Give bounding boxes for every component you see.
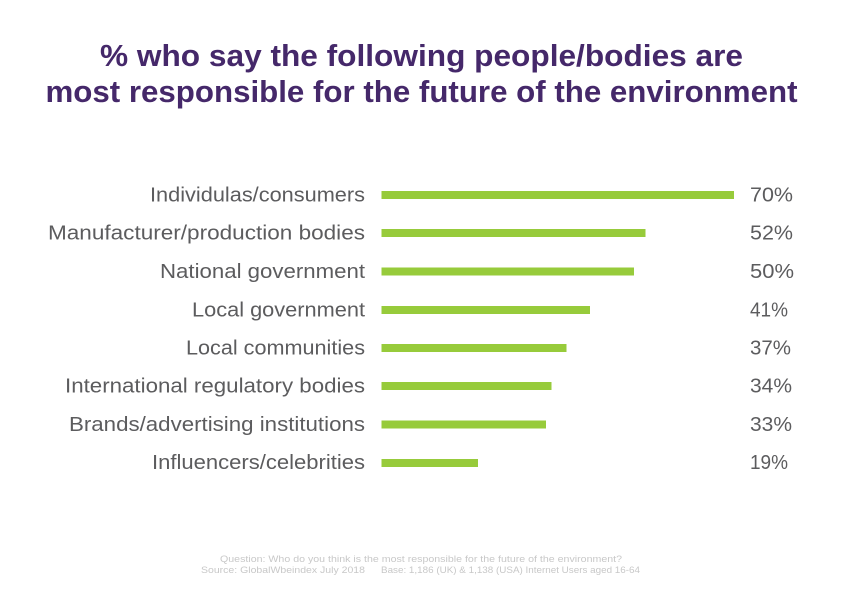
row: International regulatory bodies 34% <box>65 376 792 398</box>
row: Manufacturer/production bodies 52% <box>48 222 793 244</box>
row: National government 50%: 50% <box>750 261 794 283</box>
title: % who say the following people/bodies are <box>100 38 743 73</box>
row: Local government 41%: Local government <box>192 300 365 322</box>
row: International regulatory bodies 34%: International regulatory bodies <box>65 376 365 398</box>
row: Manufacturer/production bodies 52%: Manufacturer/production bodies <box>48 222 365 244</box>
row: Individulas/consumers 70%: Individulas/consumers <box>150 184 365 206</box>
bar chart <box>48 184 794 474</box>
row: National government 50% <box>160 261 794 283</box>
row: Local government 41%: 41% <box>750 300 788 322</box>
title <box>46 38 798 109</box>
row: Influencers/celebrities 19% <box>152 452 788 474</box>
row: International regulatory bodies 34%: 34% <box>750 376 792 398</box>
row: Local communities 37%: Local communities <box>186 338 365 360</box>
title: most responsible for the future of the environment <box>46 74 798 109</box>
row: Brands/advertising institutions 33%: 33% <box>750 414 792 436</box>
footnote: question and source <box>201 554 640 576</box>
row: National government 50%: National government <box>160 261 365 283</box>
row: Local government 41% <box>192 300 788 322</box>
row: Individulas/consumers 70%: 70% <box>750 184 793 206</box>
row: Brands/advertising institutions 33% <box>69 414 792 436</box>
footnote: question and source: Base: 1,186 (UK) & 1,138 (USA) Internet Users aged 16-64 <box>381 565 640 576</box>
row: Local communities 37% <box>186 338 791 360</box>
row: Brands/advertising institutions 33%: Brands/advertising institutions <box>69 414 365 436</box>
row: Manufacturer/production bodies 52%: 52% <box>750 222 793 244</box>
row: Local communities 37%: 37% <box>750 338 791 360</box>
footnote: question and source: Source: GlobalWbeindex July 2018 <box>201 565 365 576</box>
row: Influencers/celebrities 19%: 19% <box>750 452 788 474</box>
footnote: question and source: Question: Who do you think is the most responsible for the future of the environment? <box>220 554 622 565</box>
row: Influencers/celebrities 19%: Influencers/celebrities <box>152 452 365 474</box>
row: Individulas/consumers 70% <box>150 184 793 206</box>
